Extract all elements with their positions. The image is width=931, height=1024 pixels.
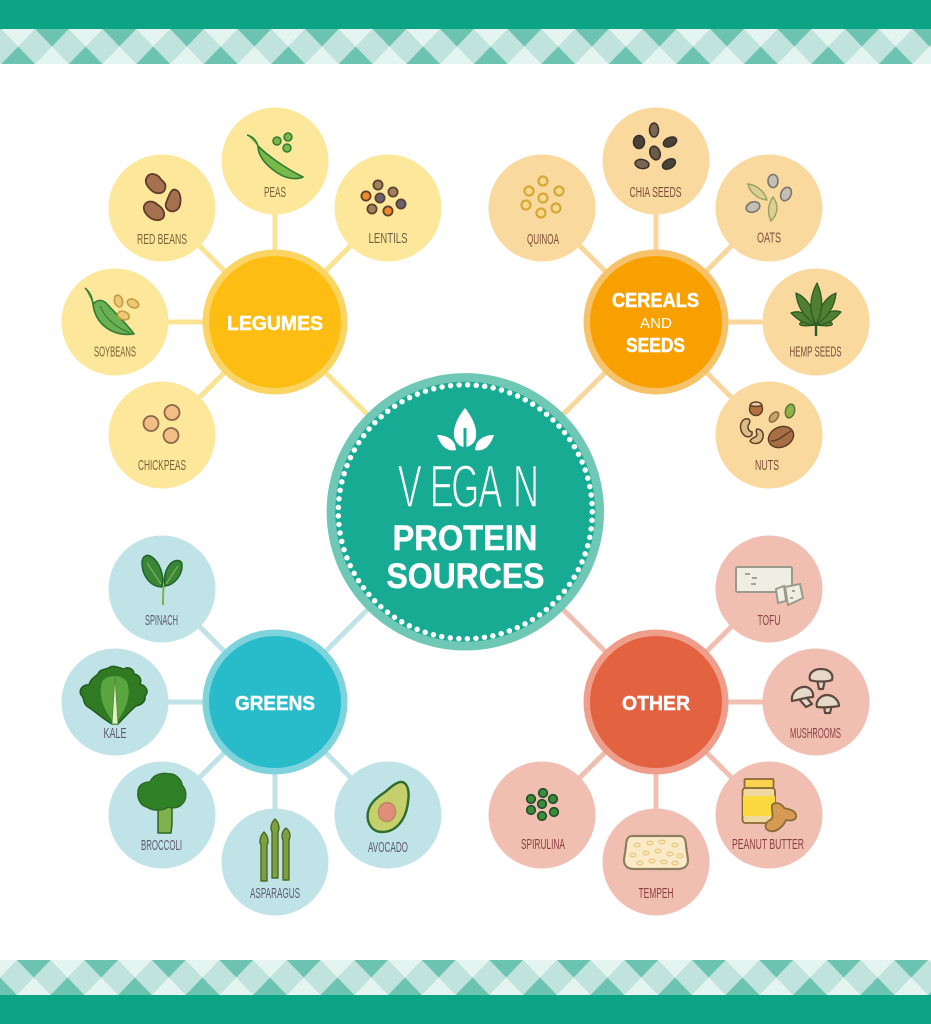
item: spirulina (488, 762, 596, 868)
item: hemp seeds (762, 268, 870, 376)
hub: cereals and seeds: AND (640, 315, 672, 332)
item: spirulina: SPIRULINA (521, 836, 565, 853)
connector lines: greens (115, 512, 465, 862)
icon: mushrooms (792, 669, 839, 713)
item: asparagus: ASPARAGUS (250, 885, 300, 902)
connector lines: legumes (115, 161, 465, 512)
title: vegan: VEGAN (398, 454, 539, 520)
item: tofu (716, 536, 822, 642)
bottom banner (0, 960, 931, 1024)
item: chia seeds (602, 108, 710, 214)
icon: three leaves (437, 408, 494, 450)
icon: tempeh (624, 836, 688, 869)
hub: other: OTHER (622, 692, 690, 715)
item: broccoli: BROCCOLI (141, 837, 182, 854)
item: tofu: TOFU (758, 612, 780, 629)
item: quinoa: QUINOA (527, 231, 559, 248)
item: nuts (716, 382, 822, 488)
item: kale: KALE (104, 725, 126, 742)
item: broccoli (108, 762, 216, 868)
central badge (327, 373, 604, 650)
icon: soybean pod (85, 288, 140, 334)
hub: greens (202, 630, 348, 774)
item: mushrooms: MUSHROOMS (790, 725, 841, 742)
item: chia seeds: CHIA SEEDS (630, 184, 682, 201)
icon: chickpeas (144, 405, 180, 443)
item: red beans: RED BEANS (137, 231, 187, 248)
hub: legumes (202, 250, 348, 394)
item: kale (62, 648, 168, 756)
icon: spinach (142, 555, 182, 605)
item: spinach (108, 536, 216, 642)
item: asparagus (222, 808, 328, 916)
item: red beans (108, 154, 216, 262)
hub: other (584, 630, 728, 774)
icon: kale (80, 666, 147, 724)
connector lines: cereals and seeds (465, 161, 816, 512)
icon: oats (745, 174, 793, 221)
item: chickpeas: CHICKPEAS (138, 457, 186, 474)
item: mushrooms (762, 648, 870, 756)
icon: chia seeds (634, 123, 678, 171)
item: oats: OATS (757, 230, 781, 246)
item: quinoa (488, 154, 596, 262)
icon: avocado (368, 782, 409, 832)
title: sources: SOURCES (386, 557, 544, 596)
icon: red beans (144, 174, 181, 220)
item: soybeans (62, 268, 168, 376)
item: avocado (334, 762, 442, 868)
item: oats (716, 154, 822, 262)
icon: hemp leaf (791, 283, 841, 336)
item: lentils: LENTILS (368, 230, 408, 247)
item: tempeh (602, 808, 710, 916)
top banner (0, 0, 931, 64)
icon: spirulina (527, 789, 558, 820)
item: avocado: AVOCADO (368, 839, 408, 856)
hub: cereals and seeds: SEEDS (626, 334, 685, 357)
title: protein: PROTEIN (392, 519, 538, 558)
icon: tofu (736, 567, 803, 605)
item: hemp seeds: HEMP SEEDS (790, 344, 842, 360)
item: lentils (334, 154, 442, 262)
hub: cereals and seeds (584, 250, 728, 394)
icon: quinoa (522, 176, 564, 218)
item: peanut butter (716, 762, 822, 868)
icon: asparagus (260, 819, 290, 881)
hub: legumes: LEGUMES (227, 312, 323, 335)
hub: cereals and seeds: CEREALS (612, 289, 699, 312)
item: peanut butter: PEANUT BUTTER (732, 836, 804, 853)
icon: peanut butter jar (742, 779, 796, 831)
icon: nuts (740, 402, 797, 452)
icon: pea pod (247, 133, 303, 179)
item: tempeh: TEMPEH (638, 885, 674, 902)
connector lines: other (465, 512, 816, 862)
hub: greens: GREENS (235, 692, 315, 715)
item: chickpeas (108, 382, 216, 488)
item: peas: PEAS (264, 184, 286, 201)
item: soybeans: SOYBEANS (94, 344, 136, 360)
item: nuts: NUTS (755, 457, 779, 474)
icon: broccoli (138, 773, 186, 833)
item: peas (222, 108, 328, 214)
item: spinach: SPINACH (145, 612, 178, 629)
icon: lentils (361, 180, 406, 216)
